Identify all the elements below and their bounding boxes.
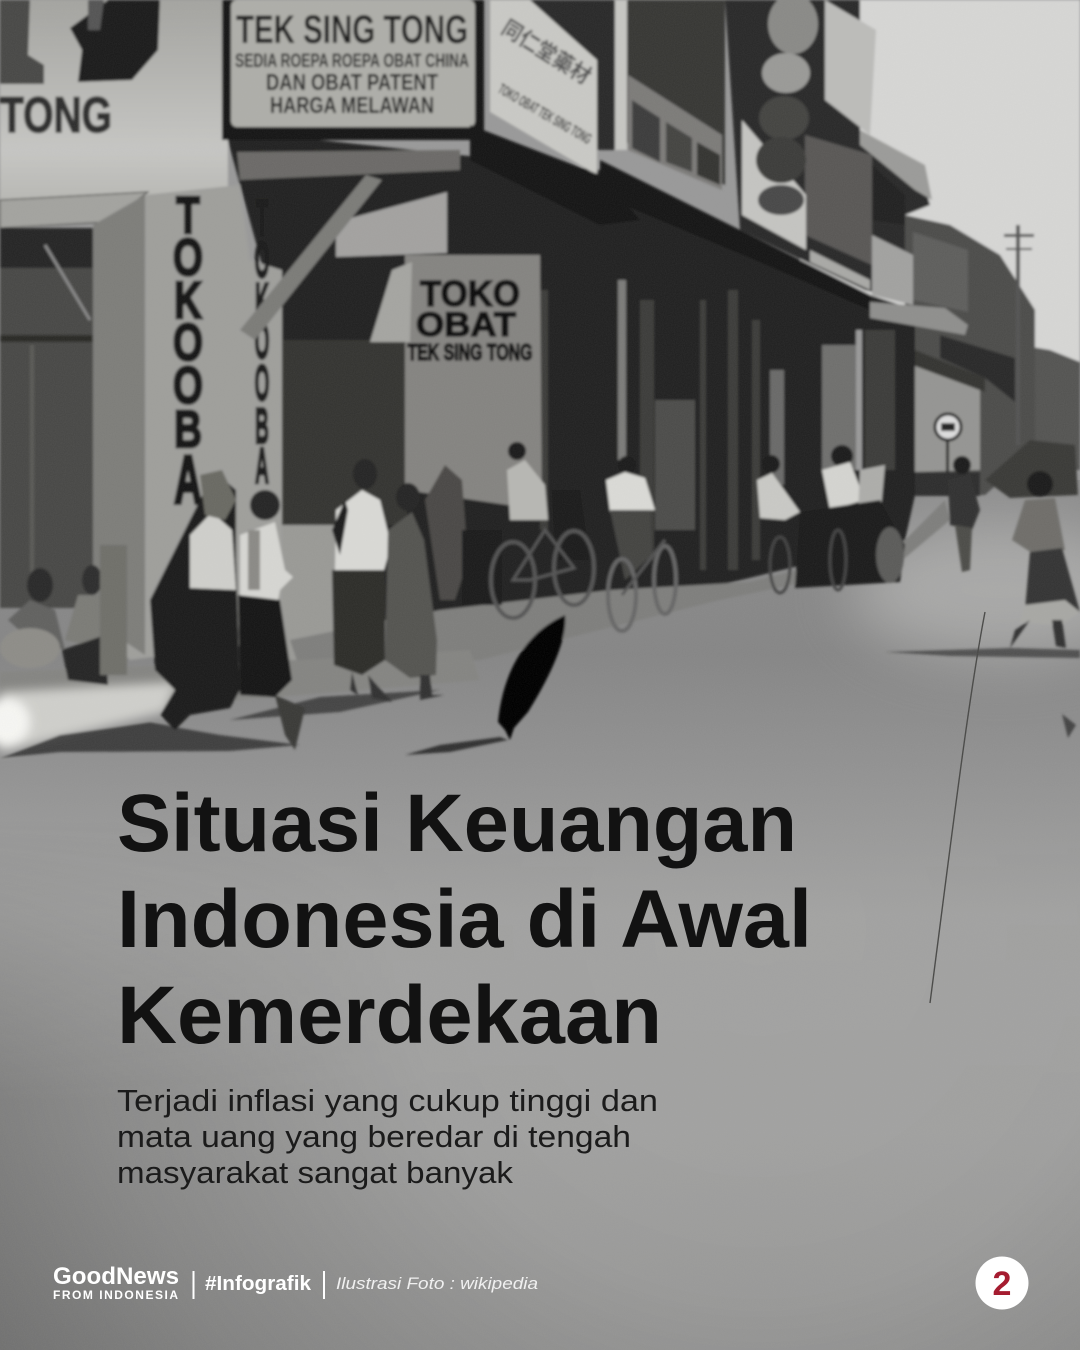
road surface — [0, 480, 1080, 1350]
subtitle: masyarakat sangat banyak — [117, 1155, 514, 1190]
far buildings — [905, 215, 1035, 495]
shop sign board: TEK SING TONG — [236, 8, 468, 52]
subtitle: mata uang yang beredar di tengah — [117, 1119, 631, 1154]
pavement — [0, 650, 480, 735]
logo: GoodNews from Indonesia: GoodNews — [53, 1263, 179, 1290]
shop sign board: SEDIA ROEPA ROEPA OBAT CHINA — [235, 51, 469, 72]
photo vignette — [0, 884, 1080, 1350]
title: Indonesia di Awal — [117, 874, 812, 965]
vertical sign side: B — [255, 399, 269, 455]
wall text TOKO OBAT: TEK SING TONG — [408, 339, 532, 365]
black film blot — [498, 615, 565, 740]
balcony — [628, 75, 722, 190]
corrugated awning — [0, 192, 148, 228]
left wall with signage — [0, 0, 228, 200]
vertical sign side: T — [256, 191, 268, 247]
vertical sign front: K — [174, 271, 202, 329]
hashtag: #Infografik — [205, 1273, 312, 1295]
vertical sign front: A — [174, 442, 202, 518]
seated people — [0, 545, 127, 685]
vertical sign front: O — [173, 356, 203, 414]
vertical sign front: B — [174, 400, 202, 458]
side sign board: 同仁堂藥材 — [497, 15, 595, 89]
photo credit: Ilustrasi Foto : wikipedia — [336, 1274, 538, 1293]
subtitle — [117, 1083, 658, 1190]
title — [117, 778, 812, 1061]
hanging white board — [336, 192, 447, 257]
separator — [192, 1271, 194, 1299]
footer brand bar — [53, 1263, 538, 1302]
vertical sign front: O — [173, 313, 203, 371]
upper sign boards — [825, 0, 876, 135]
side sign board: TOKO OBAT TEK SING TONG — [495, 81, 594, 148]
vertical sign side: K — [255, 274, 269, 330]
bicycle riders on the right with sidecar — [757, 445, 905, 593]
painted big Chinese character sign — [0, 0, 160, 84]
vertical sign side — [255, 191, 269, 495]
shop sign board: HARGA MELAWAN — [270, 92, 434, 118]
person: woman 1 with scarf — [150, 470, 240, 730]
shadows on road — [0, 648, 1080, 758]
film scratch — [930, 612, 985, 1003]
left window — [0, 228, 93, 608]
bicycle rider 2 — [606, 456, 676, 631]
shop sign board — [231, 0, 475, 127]
distant vehicles — [985, 440, 1078, 498]
vertical sign side: O — [255, 356, 269, 412]
sunlit far road — [850, 520, 1080, 660]
logo: GoodNews from Indonesia — [53, 1263, 179, 1302]
separator — [323, 1271, 325, 1299]
main dark shop frontage — [225, 130, 915, 620]
person: woman 2 — [238, 490, 305, 750]
shop sign board: DAN OBAT PATENT — [266, 69, 438, 95]
person: woman 4 — [385, 483, 444, 700]
shop wall with text — [405, 255, 542, 510]
subtitle: Terjadi inflasi yang cukup tinggi dan — [117, 1083, 658, 1118]
awning roof line — [600, 160, 870, 310]
shop interior mid tones — [540, 290, 895, 570]
shop front sign board frame — [222, 0, 484, 140]
street sign — [935, 414, 961, 440]
pedestrian in the distance — [948, 456, 980, 572]
upper storey walls — [597, 0, 725, 185]
logo: GoodNews from Indonesia: FROM INDONESIA — [53, 1288, 178, 1302]
page number badge: 2 — [993, 1265, 1011, 1303]
vertical sign front — [173, 186, 203, 518]
vertical sign side: A — [255, 439, 269, 495]
people at food stall — [425, 465, 502, 605]
shop pillars — [618, 280, 626, 460]
title: Situasi Keuangan — [117, 778, 797, 869]
diagonal wooden brace — [240, 175, 382, 340]
person: running woman right — [1010, 471, 1080, 648]
bicycle rider 1 with parked bicycle — [491, 442, 594, 618]
title: Kemerdekaan — [117, 970, 662, 1061]
page number badge — [976, 1256, 1028, 1310]
wall text TOKO OBAT: OBAT — [416, 306, 516, 344]
wall text TOKO OBAT: TOKO — [420, 273, 520, 314]
utility pole — [1004, 225, 1034, 445]
wall text TONG: TONG — [0, 87, 112, 143]
wall text TOKO OBAT — [408, 273, 532, 365]
vertical sign front: O — [173, 228, 203, 286]
side sign board — [490, 0, 597, 175]
corner column — [93, 185, 282, 660]
vertical sign front: T — [176, 186, 200, 244]
inner soffit — [237, 150, 460, 180]
person: woman 3 — [332, 459, 392, 702]
round Chinese signs — [756, 0, 818, 215]
sky — [800, 0, 1080, 400]
vertical sign side: O — [255, 314, 269, 370]
distant hill — [1020, 345, 1080, 470]
lower wall behind people — [282, 525, 342, 660]
vertical sign side: O — [255, 233, 269, 289]
shop base — [290, 500, 950, 670]
corner mark — [1062, 714, 1076, 738]
sunlit pavement band — [0, 682, 178, 752]
